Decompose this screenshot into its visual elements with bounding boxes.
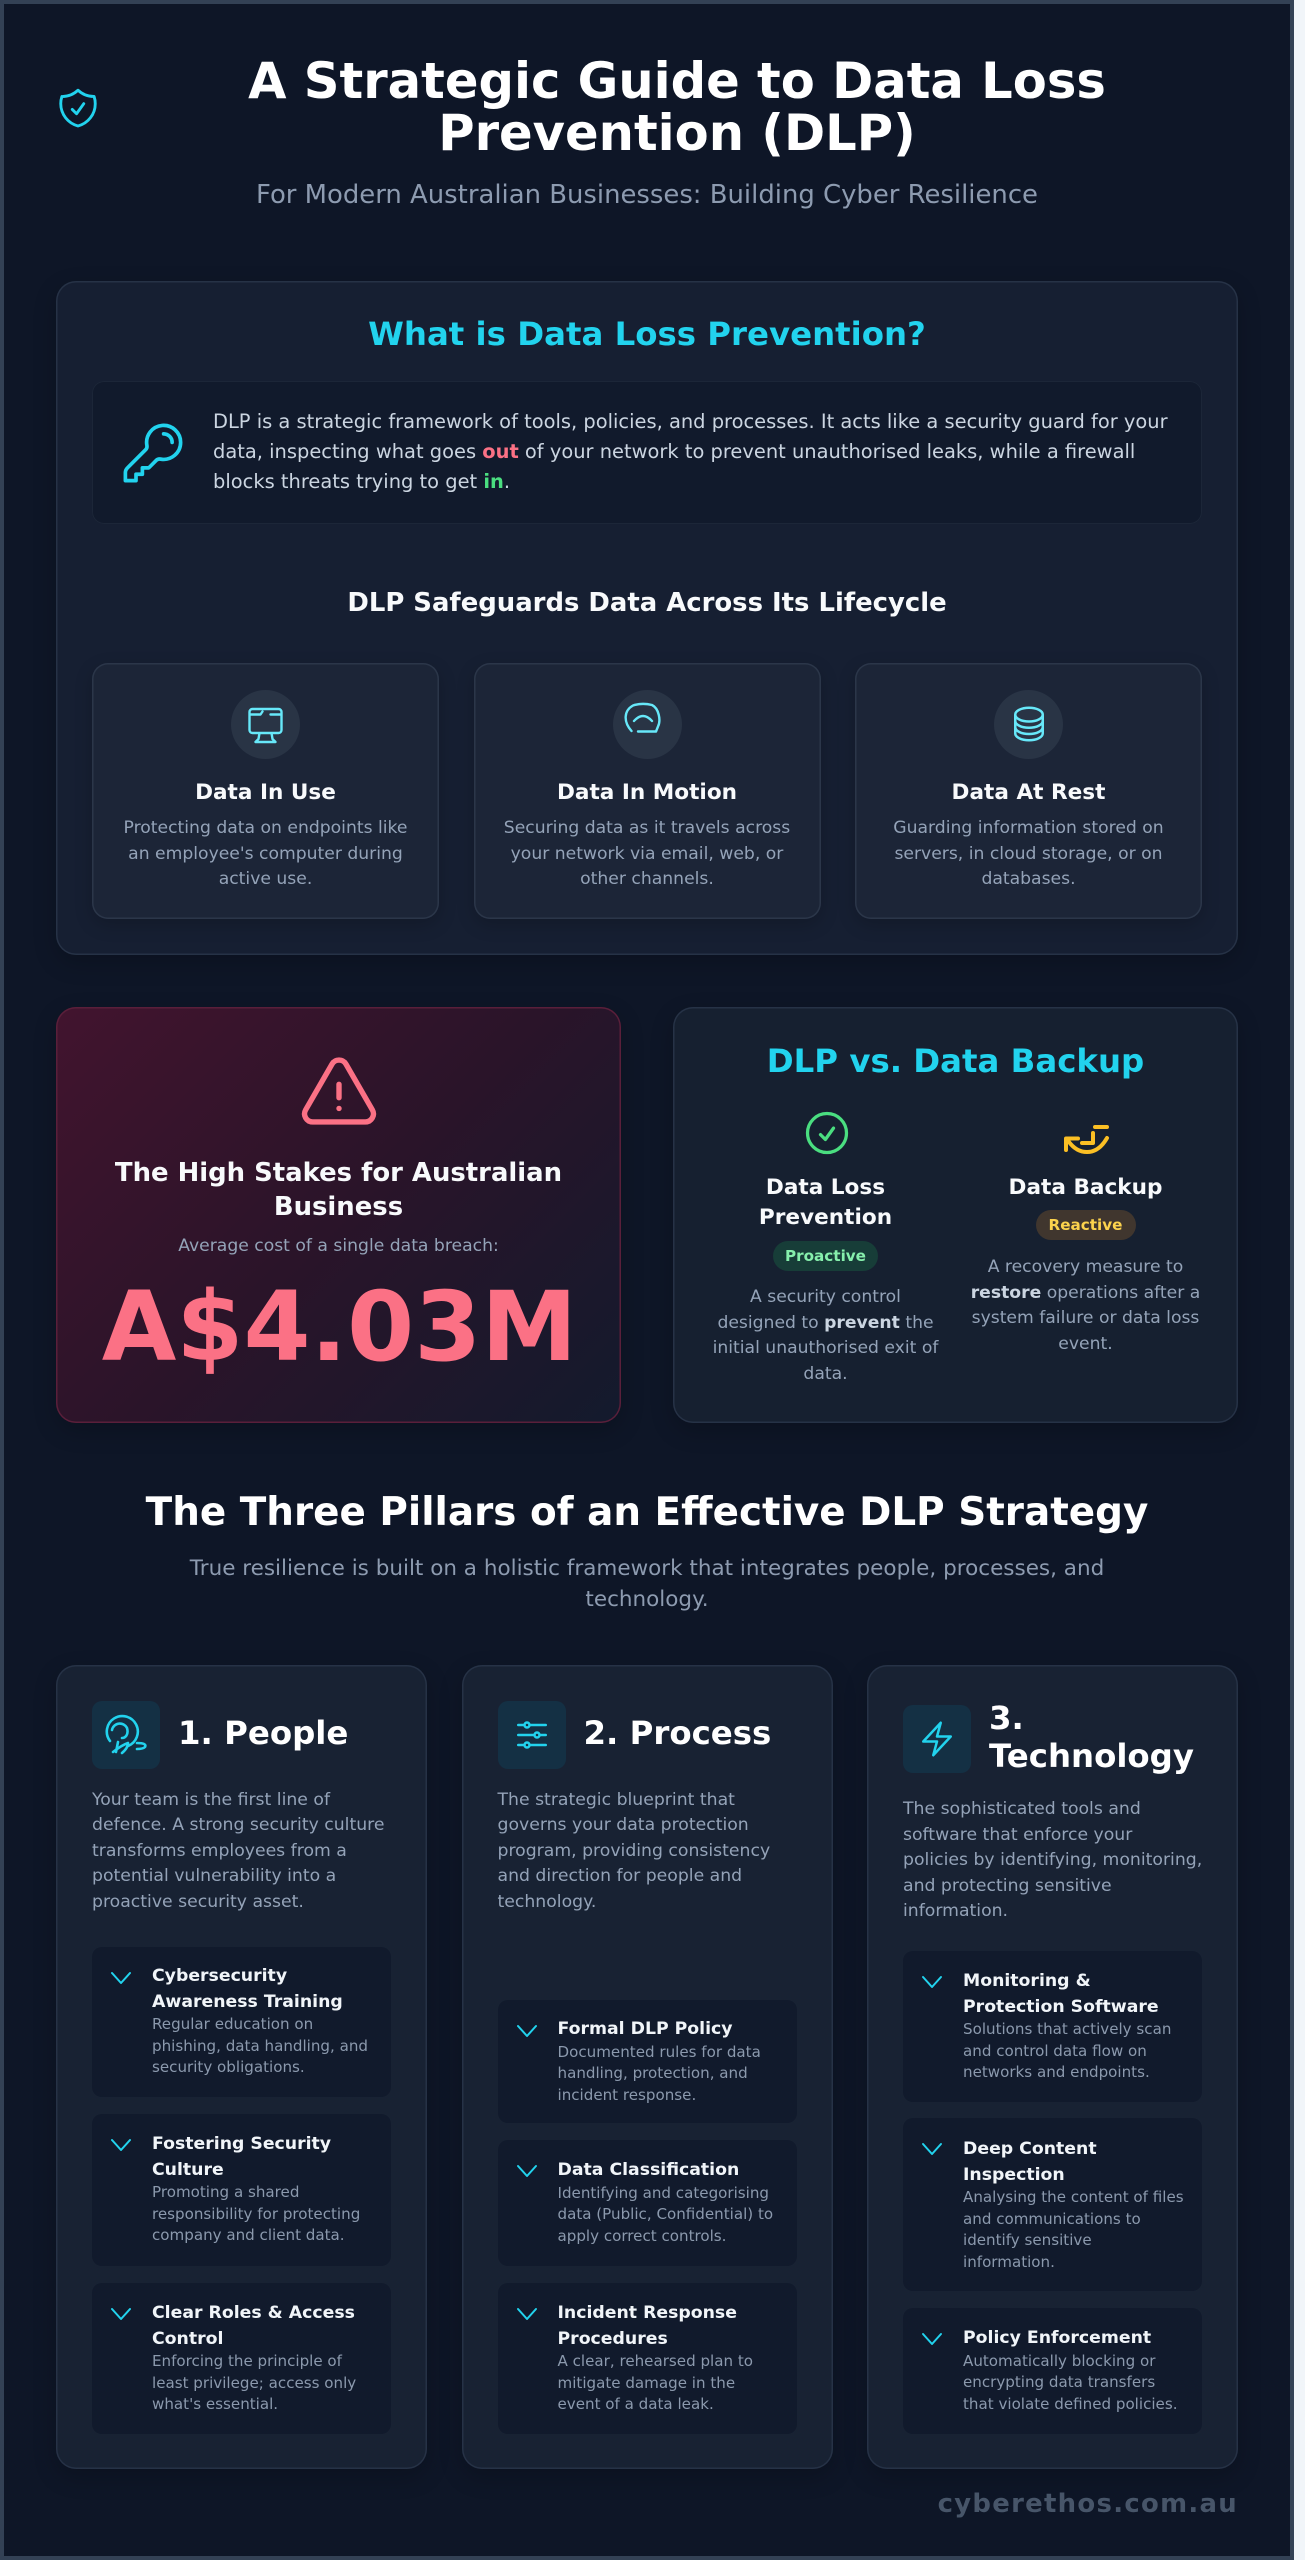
badge: proactive: Proactive [785, 1247, 866, 1265]
item text: security obligations. [152, 2058, 305, 2076]
badge: reactive [1036, 1210, 1136, 1240]
card text [504, 818, 790, 889]
icon: motion arcs [612, 690, 682, 758]
column title: DLP [759, 1175, 892, 1230]
panel: what is DLP [56, 281, 1238, 955]
callout: DLP definition [92, 381, 1202, 524]
pillar description: technology. [498, 1892, 596, 1912]
item text [558, 2160, 773, 2245]
icon: database [994, 690, 1063, 758]
column title: DLP: Prevention [759, 1205, 892, 1230]
footer brand: cyberethos.com.au [938, 2489, 1238, 2519]
card title: Data In Motion [557, 780, 737, 805]
definition text: data, inspecting what goes out of your network to prevent unauthorised leaks, while a firewall [213, 440, 1135, 463]
item text: least privilege; access only [152, 2374, 356, 2392]
item text: Solutions that actively scan [963, 2020, 1171, 2038]
item text: Identifying and categorising [558, 2184, 769, 2202]
icon: chevron [922, 1976, 942, 1988]
item: security culture [92, 2114, 391, 2266]
item text: incident response. [558, 2086, 696, 2104]
icon: chevron [517, 2025, 537, 2037]
DLP description: designed to prevent the [717, 1313, 934, 1333]
pillar description: program, providing consistency [498, 1841, 770, 1861]
card text: other channels. [580, 869, 714, 889]
item: roles and access [92, 2283, 391, 2434]
section intro: True resilience is built on a holistic framework that integrates people, processes, and [190, 1556, 1104, 1580]
item text: Automatically blocking or [963, 2352, 1155, 2370]
item text: Monitoring & [963, 1971, 1091, 1991]
DLP description [713, 1287, 939, 1384]
heading: lifecycle: DLP Safeguards Data Across Its Lifecycle [347, 588, 947, 618]
item text: responsibility for protecting [152, 2205, 360, 2223]
icon: warning triangle [302, 1057, 376, 1125]
item: DLP policy [498, 2000, 796, 2123]
item text: and control data flow on [963, 2042, 1147, 2060]
item text: Enforcing the principle of [152, 2352, 342, 2370]
icon: chevron [922, 2333, 942, 2345]
item text: that violate defined policies. [963, 2395, 1178, 2413]
item text [152, 2303, 356, 2413]
big number: A$4.03M [102, 1270, 577, 1382]
pillar description: proactive security asset. [92, 1892, 304, 1912]
icon: chevron [111, 2308, 131, 2320]
pillar description: defence. A strong security culture [92, 1815, 385, 1835]
heading: high stakes: The High Stakes for Australian [115, 1158, 562, 1188]
item text: Protection Software [963, 1997, 1159, 2017]
item text: information. [963, 2253, 1055, 2271]
badge: proactive [773, 1241, 878, 1271]
item text: phishing, data handling, and [152, 2037, 368, 2055]
icon: backup arrow [1064, 1125, 1110, 1154]
icon: monitor [231, 690, 300, 758]
pillar description: policies by identifying, monitoring, [903, 1850, 1202, 1870]
item text: Regular education on [152, 2015, 313, 2033]
card: data in motion [474, 663, 820, 919]
item text: Deep Content [963, 2139, 1097, 2159]
item: incident response [498, 2283, 796, 2434]
column title: backup: Data Backup [1009, 1175, 1162, 1200]
item text: Documented rules for data [558, 2043, 761, 2061]
DLP description: initial unauthorised exit of [713, 1338, 938, 1358]
pillar heading: 1. People [178, 1714, 348, 1752]
DLP description: data. [803, 1364, 848, 1384]
icon: key [124, 424, 182, 482]
item text: apply correct controls. [558, 2227, 726, 2245]
item text: Inspection [963, 2165, 1065, 2185]
item: monitoring software [903, 1951, 1202, 2102]
heading: high stakes [115, 1158, 562, 1222]
item text [152, 2134, 360, 2244]
item text: Formal DLP Policy [558, 2019, 733, 2039]
item text [963, 2328, 1178, 2413]
definition text: blocks threats trying to get in. [213, 470, 510, 493]
card text: your network via email, web, or [511, 844, 783, 864]
item text: what's essential. [152, 2395, 278, 2413]
icon: chevron [517, 2165, 537, 2177]
subtitle: For Modern Australian Businesses: Building Cyber Resilience [256, 180, 1038, 210]
section intro [190, 1556, 1104, 1612]
item text [558, 2303, 753, 2413]
heading: three pillars: The Three Pillars of an Effective DLP Strategy [146, 1490, 1148, 1535]
DLP description: A security control [750, 1287, 901, 1307]
item text: Clear Roles & Access [152, 2303, 355, 2323]
card text: databases. [981, 869, 1076, 889]
heading: what is DLP: What is Data Loss Prevention? [368, 315, 926, 353]
card text: servers, in cloud storage, or on [894, 844, 1163, 864]
item: content inspection [903, 2118, 1202, 2291]
item text: identify sensitive [963, 2231, 1092, 2249]
card text [893, 818, 1164, 889]
title: A Strategic Guide to Data Loss [248, 52, 1106, 110]
pillar description [92, 1790, 385, 1912]
definition text: DLP is a strategic framework of tools, policies, and processes. It acts like a security guard for your [213, 410, 1168, 432]
item text: and communications to [963, 2210, 1141, 2228]
item text: Awareness Training [152, 1992, 343, 2012]
item text: event of a data leak. [558, 2395, 714, 2413]
item text: data (Public, Confidential) to [558, 2205, 773, 2223]
pillar description: and protecting sensitive [903, 1876, 1112, 1896]
card: data in use [92, 663, 439, 919]
title: Prevention (DLP) [438, 104, 916, 162]
card title: Data In Use [195, 780, 336, 805]
item text: Policy Enforcement [963, 2328, 1151, 2348]
pillar description: The sophisticated tools and [903, 1799, 1141, 1819]
item text: Cybersecurity [152, 1966, 287, 1986]
panel: process [462, 1665, 833, 2469]
pillar heading: 2. Process [584, 1714, 771, 1752]
backup description: event. [1058, 1334, 1113, 1354]
pillar description: and direction for people and [498, 1866, 742, 1886]
item text: Data Classification [558, 2160, 739, 2180]
item: policy enforcement [903, 2308, 1202, 2434]
breach label: Average cost of a single data breach: [178, 1236, 499, 1256]
pillar description [902, 1799, 1202, 1921]
pillar heading [989, 1699, 1194, 1775]
title [248, 52, 1106, 162]
pillar description: The strategic blueprint that [498, 1790, 735, 1810]
icon: shield check [59, 88, 97, 128]
card text: Securing data as it travels across [504, 818, 790, 838]
card title: Data At Rest [952, 780, 1105, 805]
backup description: restore operations after a [971, 1283, 1200, 1303]
heading: DLP vs backup: DLP vs. Data Backup [767, 1042, 1144, 1080]
item text: Fostering Security [152, 2134, 331, 2154]
item: awareness training [92, 1947, 391, 2097]
item text [558, 2019, 761, 2104]
icon: chevron [517, 2308, 537, 2320]
icon: chevron [111, 1972, 131, 1984]
item text: Analysing the content of files [963, 2188, 1184, 2206]
item text: Incident Response [558, 2303, 737, 2323]
item text: networks and endpoints. [963, 2063, 1150, 2081]
pillar heading: 3. [989, 1699, 1024, 1737]
panel: high stakes [56, 1007, 621, 1423]
card text [124, 818, 407, 889]
pillar description: information. [903, 1901, 1008, 1921]
panel: DLP vs backup [673, 1007, 1238, 1423]
panel: people [56, 1665, 427, 2469]
pillar description [497, 1790, 770, 1912]
card: data at rest [855, 663, 1202, 919]
pillar description: software that enforce your [903, 1825, 1132, 1845]
item text: handling, protection, and [558, 2064, 748, 2082]
icon: check circle [806, 1112, 848, 1154]
backup description: system failure or data loss [972, 1308, 1199, 1328]
column title: DLP: Data Loss [766, 1175, 885, 1200]
item text: Procedures [558, 2329, 668, 2349]
section intro: technology. [585, 1586, 709, 1612]
item: data classification [498, 2140, 796, 2266]
icon: bolt [903, 1705, 971, 1773]
item text [963, 2139, 1184, 2271]
card text: Guarding information stored on [893, 818, 1164, 838]
heading: high stakes: Business [274, 1192, 403, 1222]
item text: Promoting a shared [152, 2183, 299, 2201]
pillar description: potential vulnerability into a [92, 1866, 336, 1886]
icon: fingerprint [92, 1701, 160, 1769]
backup description: A recovery measure to [988, 1257, 1183, 1277]
definition text [213, 410, 1168, 493]
item text: company and client data. [152, 2226, 345, 2244]
item text [963, 1971, 1171, 2081]
item text: Culture [152, 2160, 224, 2180]
icon: chevron [111, 2139, 131, 2151]
backup description [971, 1257, 1200, 1354]
card text: Protecting data on endpoints like [124, 818, 407, 838]
card text: active use. [219, 869, 312, 889]
item text: encrypting data transfers [963, 2373, 1155, 2391]
icon: chevron [922, 2143, 942, 2155]
icon: sliders [498, 1701, 566, 1769]
pillar heading: Technology [989, 1737, 1194, 1775]
panel: technology [867, 1665, 1238, 2469]
item text [152, 1966, 368, 2076]
badge: reactive: Reactive [1049, 1216, 1122, 1234]
item text: A clear, rehearsed plan to [558, 2352, 753, 2370]
pillar description: transforms employees from a [92, 1841, 347, 1861]
item text: mitigate damage in the [558, 2374, 735, 2392]
item text: Control [152, 2329, 223, 2349]
pillar description: Your team is the first line of [92, 1790, 330, 1810]
pillar description: governs your data protection [498, 1815, 749, 1835]
card text: an employee's computer during [128, 844, 403, 864]
